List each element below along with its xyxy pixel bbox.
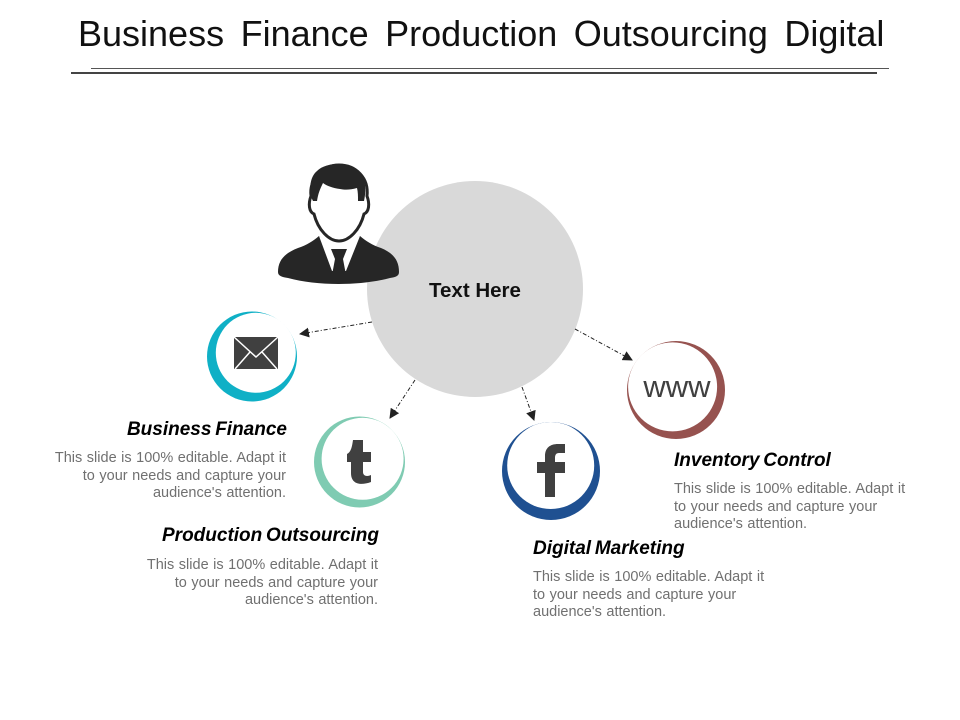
central label: Text Here: [429, 279, 521, 302]
text block: business finance: audience's attention.: [153, 485, 286, 501]
text block: digital marketing: audience's attention.: [533, 604, 666, 620]
text block: production outsourcing: Production Outsourcing: [162, 525, 379, 546]
text block: digital marketing: Digital Marketing: [533, 538, 685, 559]
text block: inventory control: Inventory Control: [674, 450, 832, 471]
text block: production outsourcing: audience's attention.: [245, 592, 378, 608]
text block: digital marketing: [533, 538, 764, 620]
text block: business finance: Business Finance: [127, 419, 287, 440]
text block: business finance: to your needs and capture your: [83, 468, 286, 484]
icon: www ring: www: [642, 369, 711, 404]
arrow: to production outsourcing: [390, 380, 415, 418]
text block: business finance: [55, 419, 287, 501]
text block: digital marketing: to your needs and capture your: [533, 587, 736, 603]
title: Business Finance Production Outsourcing Digital: [78, 13, 884, 54]
icon: email ring: [207, 312, 297, 402]
text block: production outsourcing: This slide is 100% editable. Adapt it: [147, 557, 378, 573]
arrow: to digital marketing: [522, 387, 534, 420]
text block: inventory control: to your needs and capture your: [674, 499, 877, 515]
icon: businessman: [278, 164, 399, 284]
text block: production outsourcing: [147, 525, 379, 608]
arrow: to inventory control: [575, 329, 632, 360]
central circle: [367, 181, 583, 397]
text block: inventory control: audience's attention.: [674, 516, 807, 532]
text block: digital marketing: This slide is 100% editable. Adapt it: [533, 569, 764, 585]
text block: production outsourcing: to your needs and capture your: [175, 575, 378, 591]
arrow: to business finance: [300, 322, 372, 334]
text block: inventory control: This slide is 100% editable. Adapt it: [674, 481, 905, 497]
text block: business finance: This slide is 100% editable. Adapt it: [55, 450, 286, 466]
icon: facebook ring: [502, 422, 600, 520]
title rules: [71, 68, 889, 74]
icon: www ring: [627, 341, 725, 439]
text block: inventory control: [674, 450, 905, 532]
icon: tumblr ring: [314, 416, 405, 508]
